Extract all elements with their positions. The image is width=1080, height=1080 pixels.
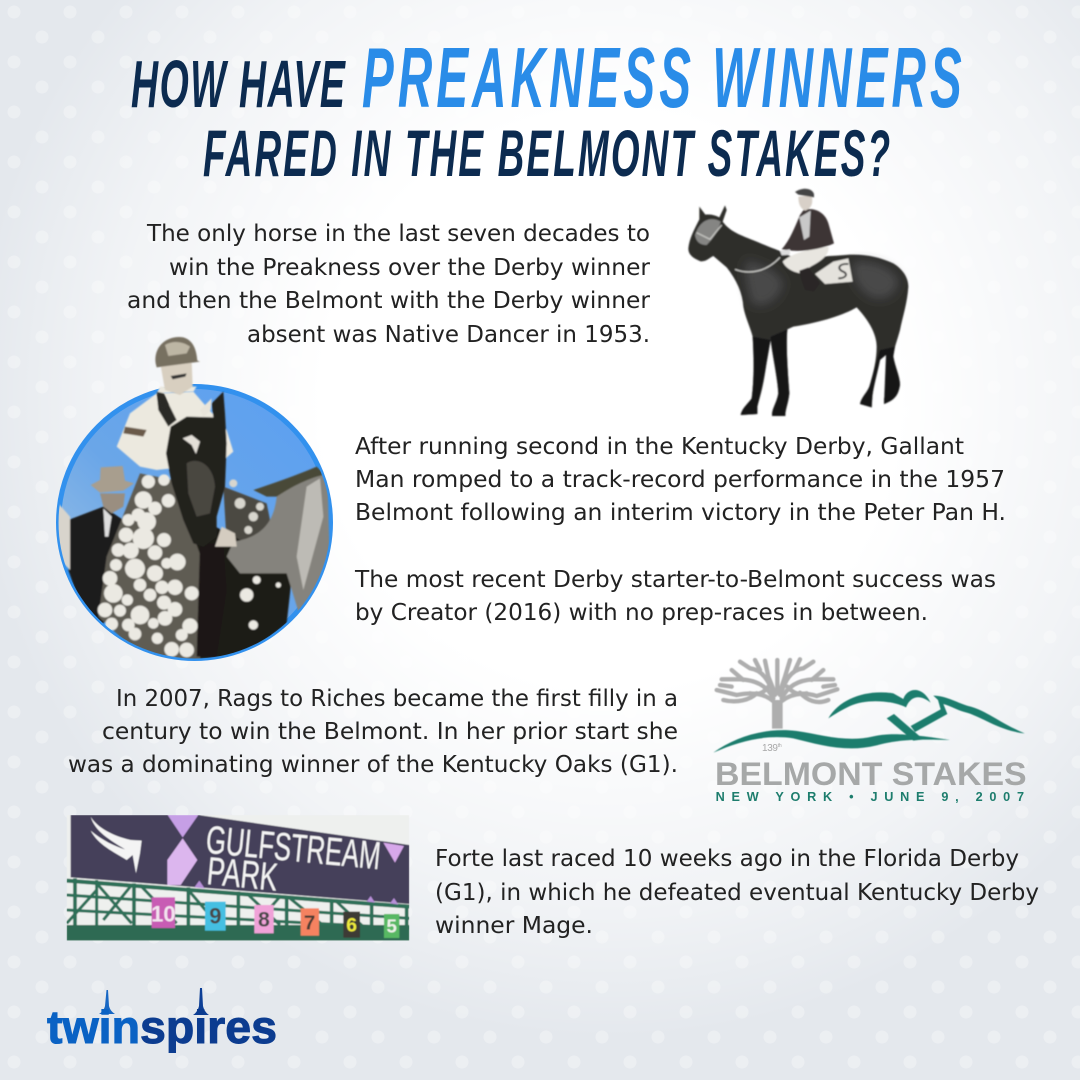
horse body highlights bbox=[745, 260, 898, 305]
photo: Gulfstream Park starting gate bbox=[67, 815, 409, 941]
gate number 9 bbox=[205, 902, 226, 931]
oak tree bbox=[717, 659, 837, 729]
photo: Gallant Man in circle bbox=[57, 337, 330, 660]
text block: Gallant Man and Creator: Belmont following an interim victory in the Peter Pan H. bbox=[355, 500, 1006, 526]
sign wordmark: GULFSTREAM bbox=[204, 818, 383, 878]
horse head highlight bbox=[695, 219, 721, 245]
text block: Forte: winner Mage. bbox=[435, 913, 593, 939]
gate green framework bbox=[66, 877, 410, 930]
spire right bbox=[193, 988, 209, 1015]
text block: Gallant Man and Creator: by Creator (2016) with no prep-races in between. bbox=[355, 600, 928, 626]
text block: Forte: (G1), in which he defeated eventual Kentucky Derby bbox=[435, 880, 1039, 906]
jockey bbox=[117, 392, 233, 470]
text block: Rags to Riches bbox=[68, 686, 678, 778]
title line one dark: HOW HAVE bbox=[131, 47, 346, 122]
gate number 7: 7 bbox=[304, 911, 315, 934]
gate number 8: 8 bbox=[258, 908, 270, 932]
text block: Rags to Riches: In 2007, Rags to Riches became the first filly in a bbox=[116, 686, 678, 712]
right man in gray suit bbox=[227, 474, 330, 617]
foliage right of horse bbox=[223, 487, 273, 543]
wordmark: twinspires bbox=[47, 1001, 277, 1053]
spire left bbox=[99, 990, 115, 1014]
horse legs dark bbox=[741, 329, 900, 416]
saddle cloth bbox=[815, 258, 853, 284]
title highlight: PREAKNESS WINNERS bbox=[362, 30, 962, 126]
logo: twinspires bbox=[47, 988, 277, 1053]
man with hat bbox=[68, 507, 123, 630]
139th: th bbox=[778, 743, 782, 749]
sign horse logo bbox=[91, 817, 142, 873]
horse head and neck bbox=[196, 553, 204, 658]
title line two: FARED IN THE BELMONT STAKES? bbox=[203, 118, 890, 191]
flower garland bbox=[183, 526, 292, 658]
title bbox=[131, 30, 962, 191]
sign board bbox=[71, 815, 409, 904]
green horse swoops bbox=[713, 690, 1025, 753]
gate number 9: 9 bbox=[209, 903, 221, 928]
gate number 10: 10 bbox=[151, 902, 176, 927]
distant trees bbox=[253, 467, 327, 497]
circular photo contents bbox=[57, 392, 330, 660]
gate number 5: 5 bbox=[386, 916, 397, 937]
text block: Forte bbox=[435, 846, 1039, 939]
text block: Gallant Man and Creator: After running second in the Kentucky Derby, Gallant bbox=[355, 434, 964, 460]
logo wordmark: BELMONT STAKES bbox=[715, 756, 1027, 792]
gate number 8 bbox=[254, 905, 274, 933]
jockey bbox=[783, 247, 829, 273]
jockey head over ring bbox=[155, 337, 200, 410]
circle sky and ring bbox=[58, 386, 330, 658]
gate number 7 bbox=[301, 908, 319, 936]
text block: Rags to Riches: century to win the Belmont. In her prior start she bbox=[102, 719, 678, 745]
text block: Gallant Man and Creator: The most recent Derby starter-to-Belmont success was bbox=[354, 567, 996, 593]
text block: Native Dancer: and then the Belmont with the Derby winner bbox=[127, 288, 651, 314]
139th: 139 bbox=[762, 743, 778, 754]
text block: Native Dancer: win the Preakness over the Derby winner bbox=[169, 255, 651, 281]
photo: horse and jockey bbox=[688, 189, 908, 416]
text block: Native Dancer bbox=[127, 221, 651, 348]
text block: Rags to Riches: was a dominating winner of the Kentucky Oaks (G1). bbox=[68, 752, 678, 778]
text block: Gallant Man and Creator bbox=[354, 434, 1006, 626]
text block: Native Dancer: absent was Native Dancer in 1953. bbox=[247, 322, 650, 348]
gate number 6 bbox=[343, 912, 360, 938]
logo date line: NEW YORK • JUNE 9, 2007 bbox=[716, 790, 1024, 804]
text block: Gallant Man and Creator: Man romped to a track-record performance in the 1957 bbox=[355, 467, 1005, 493]
sign diamonds bbox=[168, 815, 198, 837]
gate number 6: 6 bbox=[346, 916, 357, 937]
logo: 139th Belmont Stakes bbox=[713, 659, 1027, 804]
text block: Forte: Forte last raced 10 weeks ago in the Florida Derby bbox=[435, 846, 1019, 872]
gate number 5 bbox=[384, 914, 399, 938]
text block: Native Dancer: The only horse in the last seven decades to bbox=[146, 221, 650, 247]
horse body bbox=[688, 205, 908, 416]
photo: Gulfstream Park starting gate: PARK bbox=[205, 849, 280, 900]
